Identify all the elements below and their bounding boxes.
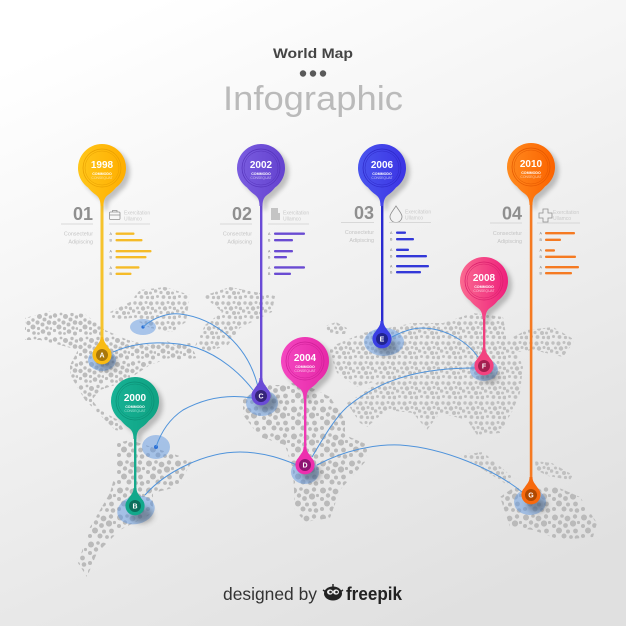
pin A: 1998 (78, 144, 130, 370)
bars 03: B (390, 238, 393, 242)
bars 01: A (110, 266, 112, 270)
bars 02 (268, 232, 305, 276)
caption 01: Ullamco (124, 216, 142, 222)
bars 04: B (540, 255, 542, 259)
bars 03: B (390, 270, 393, 274)
pin B: 2000: CONSEQUAT (124, 409, 146, 413)
designed by: designed by (223, 584, 317, 604)
North America (25, 311, 197, 432)
dotted world map (25, 287, 597, 577)
pin A: 1998: CONSEQUAT (91, 176, 113, 180)
icon: medical cross (539, 209, 552, 222)
caption 02: Exercitation (283, 210, 309, 216)
pin F: 2008 (460, 257, 512, 383)
description 04: Adipiscing (497, 239, 522, 245)
pin E: 2006: E (380, 336, 385, 344)
number 04: 04 (502, 204, 522, 224)
pin D: 2004: COMMODO (295, 365, 315, 369)
caption 04: Ullamco (553, 216, 571, 222)
pin G: 2010: 2010 (520, 159, 543, 170)
number 01: 01 (73, 204, 93, 224)
title dots (300, 70, 326, 77)
highlight blobs (88, 319, 546, 528)
bars 02: B (268, 272, 271, 276)
number 02: 02 (232, 204, 252, 224)
pin E: 2006: COMMODO (372, 172, 392, 176)
Greenland (195, 287, 275, 352)
pin F: 2008: F (482, 364, 487, 370)
New Zealand-like islands (535, 461, 573, 480)
caption 03: Exercitation (405, 210, 431, 216)
pin C: 2002: 2002 (250, 160, 273, 171)
caption 04: Exercitation (553, 210, 579, 216)
pin C: 2002: COMMODO (251, 172, 271, 176)
freepik wordmark: freepik (346, 584, 403, 604)
pin D: 2004: D (302, 462, 308, 470)
description 02: Consectetur (223, 232, 252, 238)
South-East Asia islands (460, 452, 516, 484)
description 03: Consectetur (345, 230, 374, 236)
bars 01: B (110, 238, 112, 242)
pin B: 2000 (111, 377, 163, 523)
bars 04: A (540, 232, 542, 236)
Iceland-like island (325, 322, 347, 334)
connection arcs (113, 314, 522, 495)
pin F: 2008: CONSEQUAT (473, 289, 495, 293)
pin G: 2010: G (528, 492, 534, 500)
column 01 text (61, 204, 152, 276)
pin G: 2010: CONSEQUAT (520, 175, 542, 179)
column 03 text (341, 203, 431, 274)
bars 04: B (540, 272, 542, 276)
pin E: 2006: 2006 (371, 160, 394, 171)
caption 02: Ullamco (283, 216, 301, 222)
caption 01: Exercitation (124, 210, 150, 216)
bars 03: A (390, 264, 393, 268)
pin E: 2006 (358, 144, 410, 355)
pin F: 2008: 2008 (473, 273, 496, 284)
bars 01: A (110, 232, 112, 236)
bars 02: B (268, 256, 271, 260)
title: World Map: World Map (273, 45, 353, 61)
description 01: Adipiscing (68, 240, 93, 246)
pin A: 1998: COMMODO (92, 172, 112, 176)
Arctic islands (110, 287, 190, 332)
South America (78, 440, 193, 577)
bars 04: A (540, 248, 542, 252)
pin F: 2008: COMMODO (474, 285, 494, 289)
bars 02: A (268, 250, 271, 254)
icon: freepik mascot (323, 584, 343, 600)
description 04: Consectetur (493, 231, 522, 237)
pin G: 2010 (507, 143, 559, 512)
pin B: 2000: B (132, 504, 138, 510)
pin C: 2002: C (258, 394, 264, 400)
bars 01 (110, 232, 152, 276)
pin B: 2000: 2000 (124, 393, 147, 404)
pin E: 2006: CONSEQUAT (371, 176, 393, 180)
bars 02: B (268, 238, 271, 242)
icon: building (271, 208, 280, 220)
pin B: 2000: COMMODO (125, 405, 145, 409)
caption 03: Ullamco (405, 216, 423, 222)
bars 02: A (268, 266, 271, 270)
bars 03: A (390, 231, 393, 235)
description 03: Adipiscing (349, 238, 374, 244)
icon: water drop (390, 206, 402, 223)
Africa (243, 382, 368, 522)
blob anchor dots (141, 325, 158, 449)
number 03: 03 (354, 203, 374, 223)
pin G: 2010: COMMODO (521, 171, 541, 175)
bars 01: B (110, 256, 112, 260)
column 04 text (490, 204, 580, 276)
bars 04 (540, 232, 579, 276)
bars 03: A (390, 248, 393, 252)
pin D: 2004: 2004 (294, 353, 317, 364)
bars 01: B (110, 272, 112, 276)
pin C: 2002: CONSEQUAT (250, 176, 272, 180)
bars 04: B (540, 238, 542, 242)
column 02 text (220, 204, 309, 276)
bars 03 (390, 231, 429, 274)
title: Infographic: Infographic (223, 80, 403, 118)
pin A: 1998: A (99, 352, 105, 360)
bars 02: A (268, 232, 271, 236)
pin A: 1998: 1998 (91, 160, 114, 171)
Australia (500, 487, 597, 540)
icon: briefcase (110, 210, 120, 220)
description 02: Adipiscing (227, 240, 252, 246)
description 01: Consectetur (64, 232, 93, 238)
pin D: 2004 (281, 337, 333, 481)
bars 01: A (110, 250, 112, 254)
bars 03: B (390, 254, 393, 258)
Eurasia (330, 313, 575, 435)
pin D: 2004: CONSEQUAT (294, 369, 316, 373)
pin C: 2002 (237, 144, 289, 411)
bars 04: A (540, 266, 542, 270)
footer credit (223, 584, 403, 604)
